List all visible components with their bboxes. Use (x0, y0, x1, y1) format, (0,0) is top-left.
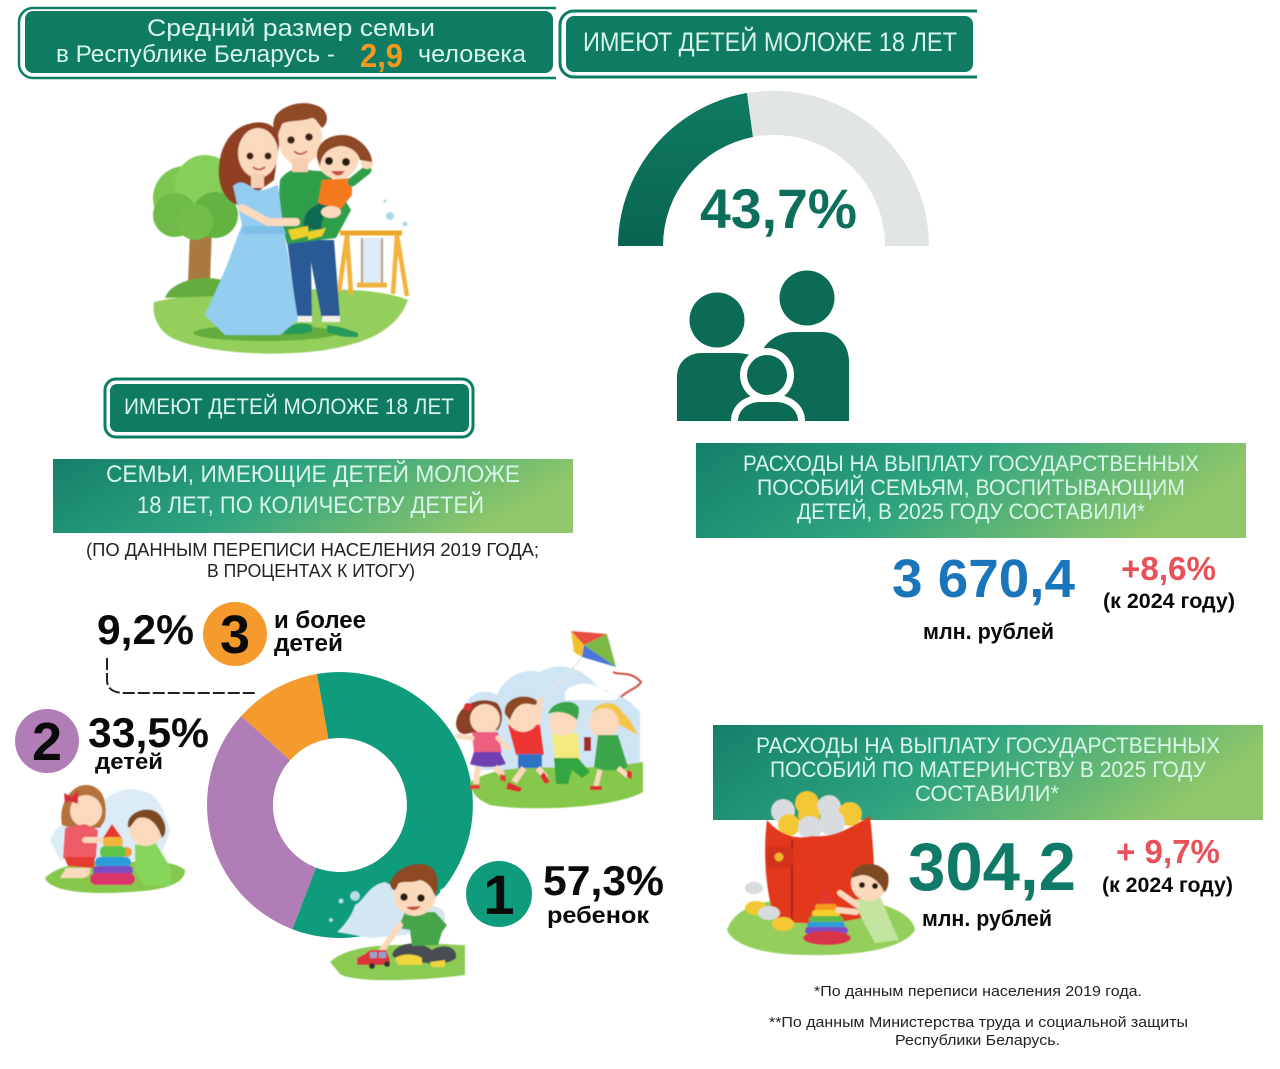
sparkles (384, 200, 408, 226)
toy car (357, 950, 390, 969)
stat: 3 670.4 million rubles: (к 2024 году) (1103, 590, 1235, 613)
stat: 3 670.4 million rubles: +8,6% (1121, 550, 1216, 587)
note: census source: (ПО ДАННЫМ ПЕРЕПИСИ НАСЕЛЕНИЯ 2019 ГОДА; (86, 540, 539, 560)
illustration: boy playing with a toy car (329, 864, 466, 980)
icon: parents and child (677, 270, 849, 421)
toy pyramid (90, 824, 135, 885)
segment: 3 or more children 9.2% (241, 674, 328, 760)
illustration: children running with a kite (456, 631, 643, 808)
stat: 3 670.4 million rubles: 3 670,4 (892, 549, 1075, 609)
coins in wallet (771, 791, 862, 840)
red wallet (765, 816, 874, 923)
ground shadow (193, 325, 337, 341)
heading: state child benefit spending: ДЕТЕЙ, В 2025 ГОДУ СОСТАВИЛИ* (797, 499, 1145, 524)
stat: 3 670.4 million rubles: млн. рублей (923, 619, 1054, 644)
stat: 304.2 million rubles: млн. рублей (922, 906, 1052, 931)
stat: 304.2 million rubles: 304,2 (908, 829, 1076, 905)
heading: families by number of children (53, 459, 573, 533)
legend: 3 or more children (97, 602, 366, 666)
stat: 304.2 million rubles (908, 829, 1233, 931)
legend: 1 child: ребенок (547, 902, 650, 928)
segment: 2 children 33.5% (207, 716, 316, 929)
grass (727, 899, 915, 955)
banner: have children under 18 (top) (560, 11, 990, 77)
note: census source (86, 540, 539, 581)
tree (153, 155, 238, 298)
legend: 1 child: 1 (483, 863, 515, 926)
banner: have children under 18 (left) (105, 379, 473, 437)
banner: have children under 18 (left): ИМЕЮТ ДЕТЕЙ МОЛОЖЕ 18 ЛЕТ (124, 394, 454, 419)
heading: maternity benefit spending: ПОСОБИЙ ПО МАТЕРИНСТВУ В 2025 ГОДУ (770, 757, 1207, 782)
white gap to the right (440, 880, 466, 945)
woman (205, 122, 298, 335)
girl with pink shirt (456, 700, 508, 789)
grass (470, 762, 643, 808)
leader line: 9.2% to orange segment (107, 658, 256, 693)
legend: 1 child (466, 857, 664, 928)
cloud (468, 666, 640, 770)
girl with green dress (584, 703, 638, 790)
heading: maternity benefit spending: РАСХОДЫ НА ВЫПЛАТУ ГОСУДАРСТВЕННЫХ (756, 733, 1220, 758)
legend: 3 or more children: и более (274, 607, 366, 634)
heading: state child benefit spending (696, 443, 1246, 538)
boy (382, 864, 456, 967)
legend: 3 or more children: детей (274, 630, 343, 657)
footnotes: *По данным переписи населения 2019 года. (814, 983, 1142, 1000)
legend: 2 children: детей (95, 749, 163, 774)
footnotes (769, 983, 1188, 1049)
grass (154, 289, 408, 354)
banner: average family size (19, 8, 579, 78)
kite (542, 631, 641, 697)
banner: have children under 18 (top): ИМЕЮТ ДЕТЕЙ МОЛОЖЕ 18 ЛЕТ (583, 26, 957, 57)
swing (339, 233, 407, 296)
illustration: two children with a toy pyramid (45, 785, 185, 893)
heading: state child benefit spending: РАСХОДЫ НА ВЫПЛАТУ ГОСУДАРСТВЕННЫХ (743, 451, 1199, 476)
legend: 2 children: 33,5% (88, 709, 209, 756)
legend: 2 children: 2 (32, 712, 62, 772)
stat: 304.2 million rubles: + 9,7% (1116, 833, 1220, 870)
girl (60, 785, 106, 878)
baby (838, 864, 899, 943)
legend: 1 child: 57,3% (543, 857, 664, 904)
heading: state child benefit spending: ПОСОБИЙ СЕМЬЯМ, ВОСПИТЫВАЮЩИМ (757, 475, 1185, 500)
heading: maternity benefit spending (713, 725, 1263, 820)
illustration: wallet with coins and baby (727, 791, 915, 955)
banner: average family size: в Республике Беларусь - (56, 41, 335, 68)
child on man's arm (288, 135, 373, 240)
banner: average family size: Средний размер семьи (147, 15, 435, 42)
stat: 3 670.4 million rubles (892, 549, 1235, 644)
toddler boy (122, 809, 172, 886)
grass (330, 944, 465, 980)
grass (45, 861, 185, 893)
loose coins (745, 882, 794, 931)
illustration: family in a park (153, 103, 408, 354)
cloud (337, 882, 447, 938)
man (273, 103, 358, 337)
boy with red shirt (505, 696, 550, 792)
banner: average family size: человека (418, 41, 527, 68)
legend: 2 children (15, 709, 209, 774)
boy with green cap (548, 702, 590, 784)
heading: families by number of children: 18 ЛЕТ, ПО КОЛИЧЕСТВУ ДЕТЕЙ (137, 491, 484, 519)
note: census source: В ПРОЦЕНТАХ К ИТОГУ) (207, 561, 415, 581)
toy pyramid (803, 887, 851, 945)
heading: families by number of children: СЕМЬИ, ИМЕЮЩИЕ ДЕТЕЙ МОЛОЖЕ (106, 460, 520, 488)
footnotes: **По данным Министерства труда и социальной защиты (769, 1014, 1188, 1031)
gauge: 43.7% (618, 91, 929, 246)
footnotes: Республики Беларусь. (895, 1032, 1060, 1049)
legend: 3 or more children: 9,2% (97, 606, 194, 653)
gauge: 43.7%: 43,7% (700, 177, 857, 240)
banner: average family size: 2,9 (360, 37, 403, 74)
stat: 304.2 million rubles: (к 2024 году) (1102, 874, 1233, 897)
segment: 1 child 57.3% (292, 672, 473, 938)
cloud (50, 789, 170, 860)
legend: 3 or more children: 3 (220, 605, 250, 665)
heading: maternity benefit spending: СОСТАВИЛИ* (915, 781, 1059, 806)
donut chart: families by number of children (207, 672, 473, 938)
